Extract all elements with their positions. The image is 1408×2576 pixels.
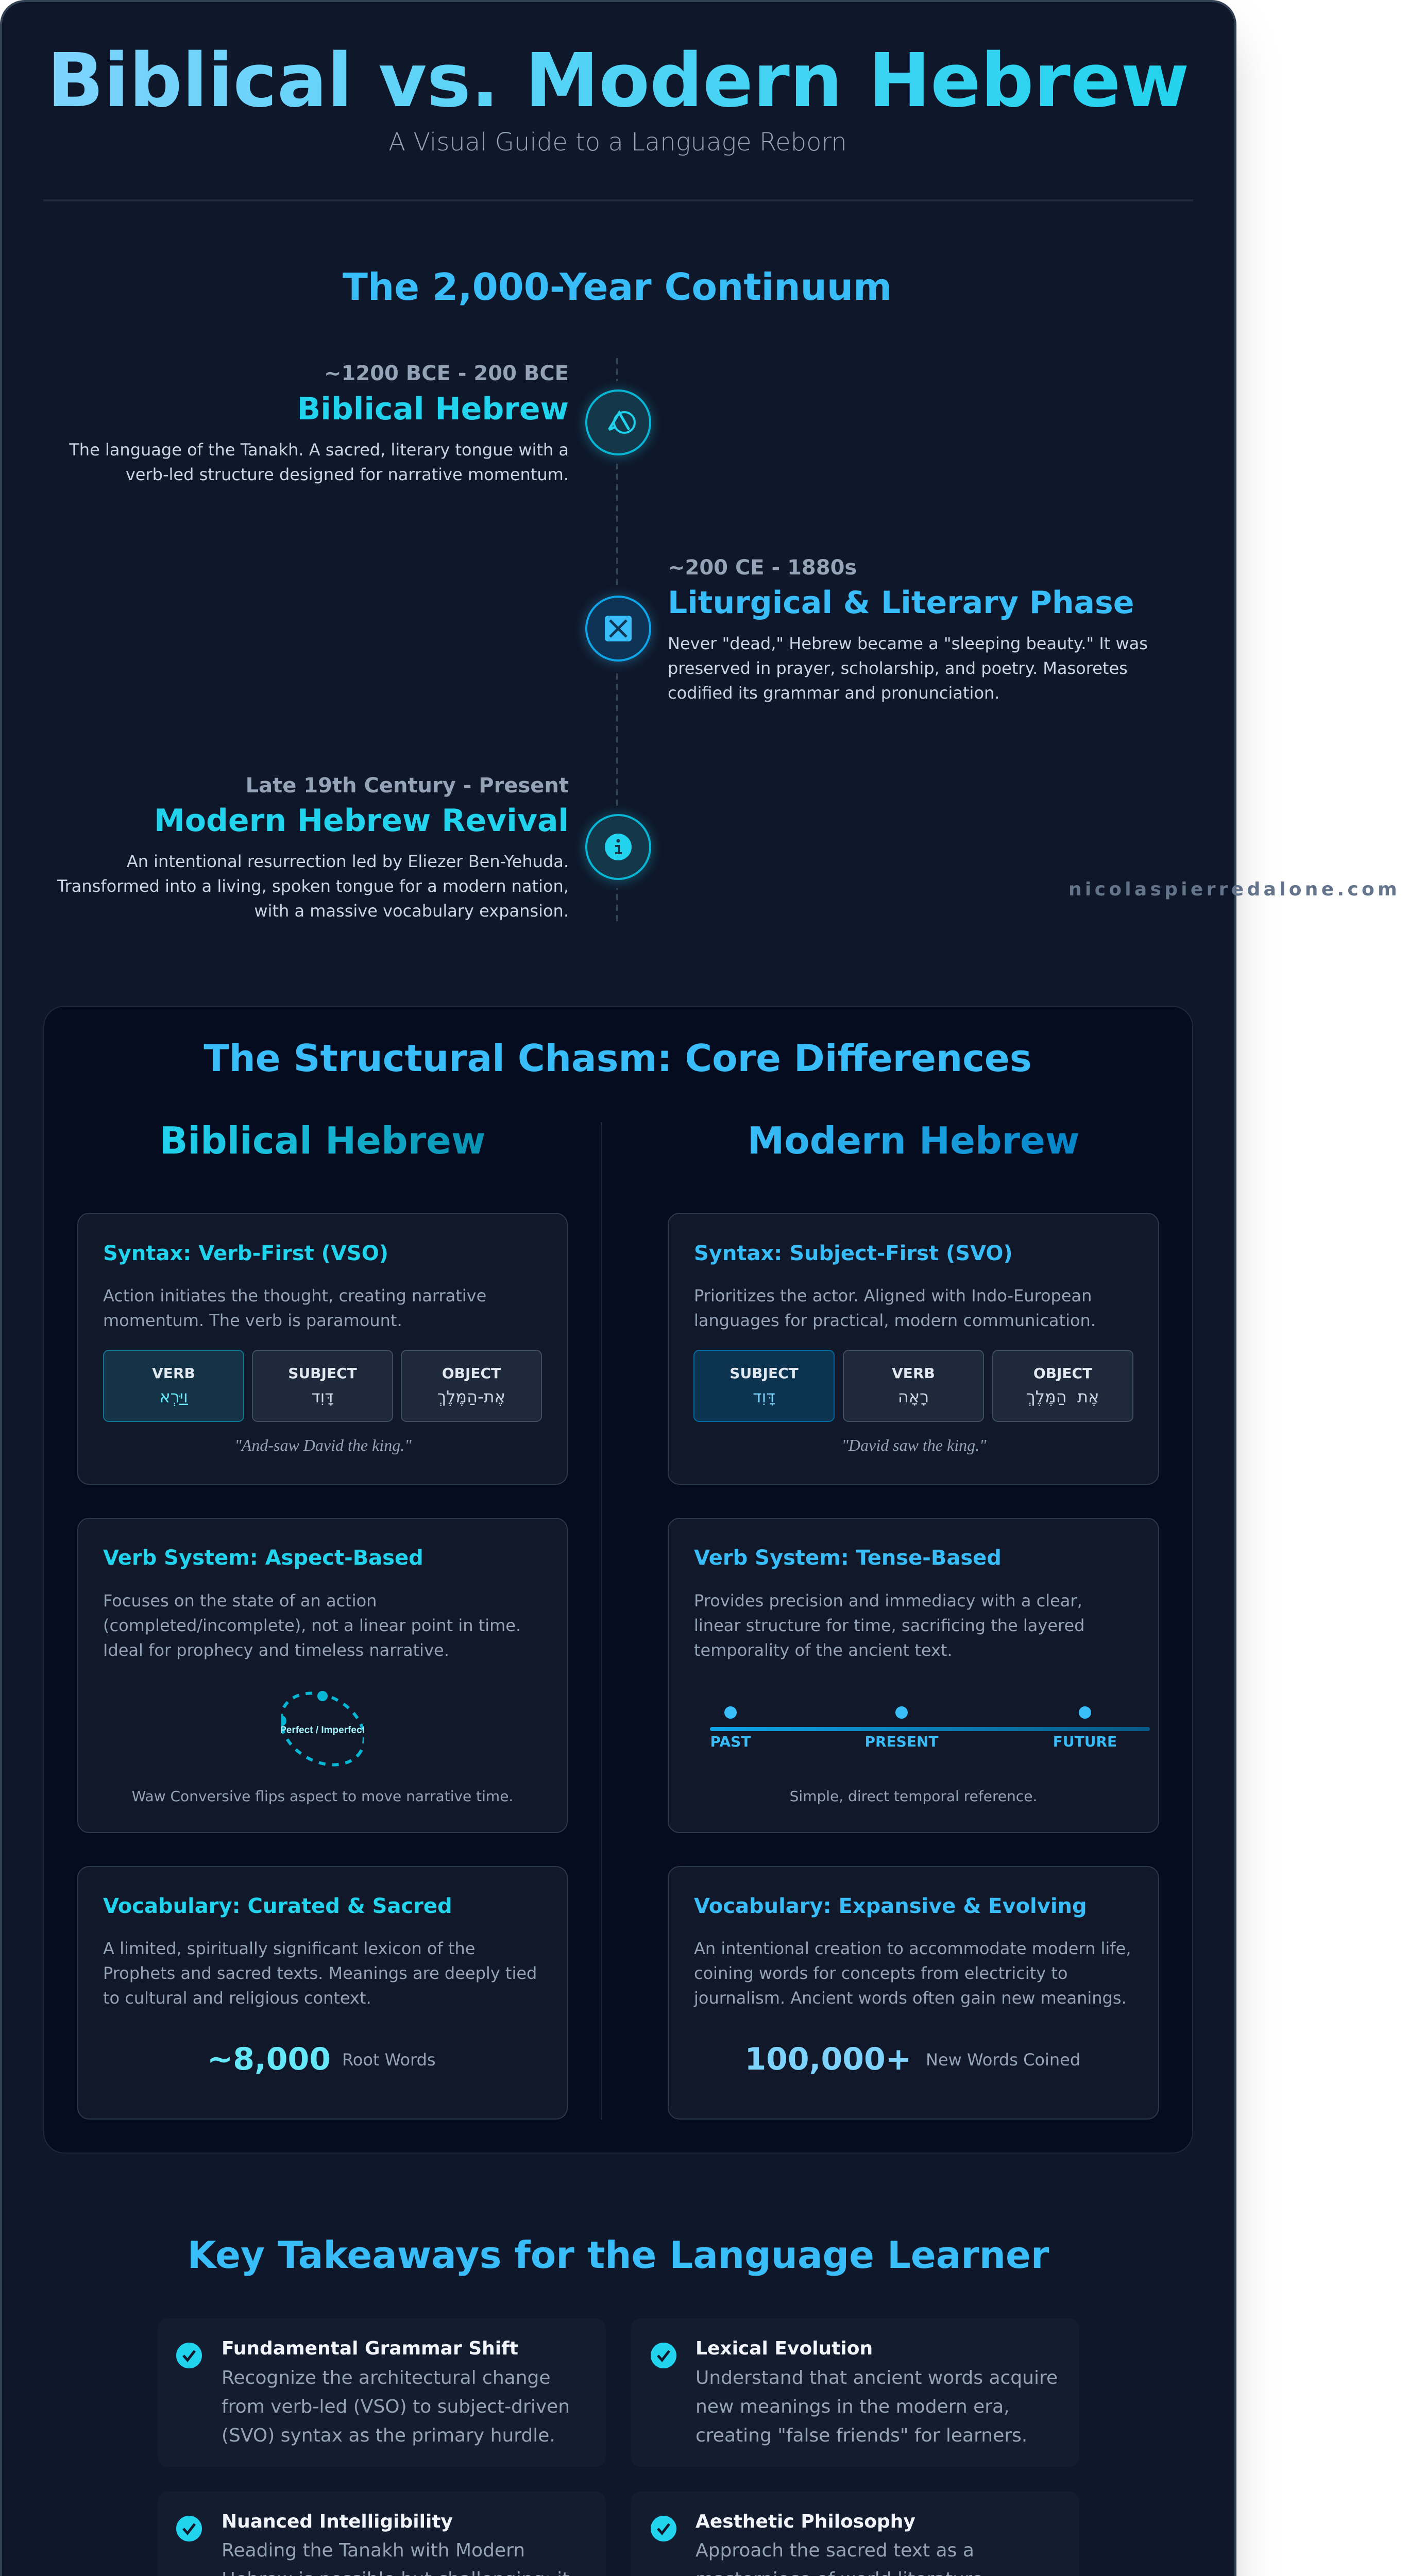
diagram: aspect cycle [281,1691,364,1766]
diagram: tense line: PRESENT [864,1733,939,1750]
timeline [577,358,659,923]
card: biblical vocabulary: A limited, spiritually significant lexicon of the [103,1939,475,1958]
card: biblical verb system: Focuses on the state of an action [103,1591,377,1611]
card: modern vocabulary: coining words for concepts from electricity to [694,1963,1067,1983]
word box: object: אֶת הַמֶּלֶךְ [1027,1387,1099,1406]
card: modern vocabulary: journalism. Ancient words often gain new meanings. [693,1988,1127,2008]
card: modern syntax [668,1213,1159,1484]
card: modern syntax: Prioritizes the actor. Aligned with Indo-European [694,1286,1092,1306]
card: modern vocabulary [668,1867,1159,2119]
card: modern syntax: "David saw the king." [841,1436,987,1454]
icon: check [176,2516,202,2541]
takeaway: lexical evolution: new meanings in the modern era, [695,2396,1010,2417]
card: modern syntax: languages for practical, modern communication. [694,1311,1096,1330]
word box: object: OBJECT [442,1365,501,1382]
word box: verb: VERB [152,1365,195,1382]
card: modern verb system: Verb System: Tense-Based [694,1546,1002,1570]
timeline node: modern [577,806,659,888]
card: biblical verb system: Ideal for prophecy and timeless narrative. [103,1640,449,1660]
section heading: takeaways: Key Takeaways for the Language Learner [188,2233,1049,2277]
section heading: continuum: The 2,000-Year Continuum [343,265,892,309]
timeline entry: modern revival: An intentional resurrection led by Eliezer Ben-Yehuda. [127,852,569,871]
timeline entry: biblical hebrew [69,362,569,484]
takeaway: lexical evolution: Lexical Evolution [695,2338,873,2359]
icon: check [176,2343,202,2368]
takeaway: grammar shift: from verb-led (VSO) to subject-driven [222,2396,570,2417]
title: Biblical vs. Modern Hebrew [47,37,1189,124]
column heading: biblical: Biblical Hebrew [160,1119,485,1162]
card: biblical syntax: "And-saw David the king." [234,1436,412,1454]
takeaway: aesthetic philosophy: Aesthetic Philosophy [695,2511,915,2532]
timeline entry: modern revival: Late 19th Century - Present [246,774,569,798]
timeline entry: biblical hebrew: verb-led structure designed for narrative momentum. [126,465,569,484]
timeline entry: liturgical phase: Liturgical & Literary Phase [668,585,1134,621]
takeaway: lexical evolution [631,2318,1079,2467]
card: biblical verb system [78,1518,567,1833]
word box: subject: דָּוִד [311,1387,334,1406]
word box: object [993,1350,1133,1421]
timeline entry: biblical hebrew: Biblical Hebrew [297,391,569,427]
card: biblical vocabulary [78,1867,567,2119]
word box: subject: דָּוִד [753,1387,775,1406]
timeline entry: modern revival: Transformed into a living, spoken tongue for a modern nation, [57,876,569,896]
timeline entry: liturgical phase: Never "dead," Hebrew became a "sleeping beauty." It was [668,634,1148,653]
word box: subject [252,1350,393,1421]
watermark: nicolaspierredalone.com [1068,879,1400,900]
stat: new words: New Words Coined [926,2050,1080,2070]
card: modern syntax: Syntax: Subject-First (SVO) [694,1242,1013,1265]
timeline entry: biblical hebrew: ~1200 BCE - 200 BCE [324,362,569,385]
card: modern verb system: Provides precision and immediacy with a clear, [694,1591,1082,1611]
timeline entry: modern revival: Modern Hebrew Revival [154,803,569,839]
card: biblical verb system: Waw Conversive flips aspect to move narrative time. [132,1788,513,1805]
diagram: tense line: PAST [710,1733,751,1750]
card: modern vocabulary: An intentional creation to accommodate modern life, [694,1939,1131,1958]
stat: new words: 100,000+ [744,2041,911,2077]
word box: subject: SUBJECT [730,1365,799,1382]
takeaway: lexical evolution: creating "false friends" for learners. [695,2425,1027,2446]
stat: root words [207,2041,436,2077]
word box: subject: SUBJECT [288,1365,357,1382]
timeline node: liturgical [577,587,659,670]
card: biblical vocabulary: Vocabulary: Curated & Sacred [103,1894,452,1918]
card: modern vocabulary: Vocabulary: Expansive & Evolving [694,1894,1087,1918]
timeline entry: modern revival [57,774,569,921]
word box: verb: VERB [892,1365,935,1382]
card: biblical verb system: Verb System: Aspect-Based [103,1546,423,1570]
card: modern verb system: Simple, direct temporal reference. [790,1788,1037,1805]
card: biblical vocabulary: to cultural and religious context. [103,1988,371,2008]
takeaway: intelligibility: Nuanced Intelligibility [222,2511,453,2532]
word box: verb [843,1350,983,1421]
timeline node: biblical [577,381,659,464]
takeaway: aesthetic philosophy: Approach the sacred text as a [695,2540,974,2561]
timeline entry: modern revival: with a massive vocabulary expansion. [254,901,569,921]
stat: root words: Root Words [342,2050,436,2070]
heading: structural chasm: The Structural Chasm: Core Differences [203,1037,1032,1080]
panel: structural chasm [44,1006,1193,2153]
word box: object: OBJECT [1033,1365,1092,1382]
takeaway: grammar shift: Recognize the architectural change [222,2367,551,2388]
word box: subject [694,1350,834,1421]
timeline entry: biblical hebrew: The language of the Tanakh. A sacred, literary tongue with a [69,440,569,460]
takeaway: grammar shift: (SVO) syntax as the primary hurdle. [222,2425,555,2446]
takeaway: grammar shift [158,2318,606,2467]
card: biblical syntax [78,1213,567,1484]
diagram: tense line [710,1706,1150,1750]
takeaway: grammar shift: Fundamental Grammar Shift [222,2338,518,2359]
word box: object [401,1350,541,1421]
word box: object: אֶת-הַמֶּלֶךְ [437,1387,505,1406]
timeline entry: liturgical phase: codified its grammar and pronunciation. [668,683,999,703]
diagram: aspect cycle: Perfect / Imperfect [280,1725,366,1736]
takeaway: intelligibility [158,2492,606,2576]
takeaway: intelligibility: Reading the Tanakh with Modern [222,2540,525,2561]
timeline entry: liturgical phase: preserved in prayer, scholarship, and poetry. Masoretes [668,658,1128,678]
card: biblical syntax: Syntax: Verb-First (VSO) [103,1242,388,1265]
card: modern verb system: temporality of the ancient text. [694,1640,953,1660]
takeaway: lexical evolution: Understand that ancient words acquire [695,2367,1058,2388]
stat: new words [744,2041,1080,2077]
icon: check [651,2516,676,2541]
card: biblical vocabulary: Prophets and sacred texts. Meanings are deeply tied [103,1963,537,1983]
stat: root words: ~8,000 [207,2041,331,2077]
card: modern verb system [668,1518,1159,1833]
icon: check [651,2343,676,2368]
card: biblical syntax: Action initiates the thought, creating narrative [103,1286,486,1306]
subtitle: A Visual Guide to a Language Reborn [388,128,847,157]
diagram: tense line: FUTURE [1053,1733,1117,1750]
word box: verb: רָאָה [898,1387,929,1406]
column heading: modern: Modern Hebrew [748,1119,1079,1162]
card: biblical verb system: (completed/incomplete), not a linear point in time. [103,1616,521,1635]
card: biblical syntax: momentum. The verb is paramount. [103,1311,402,1330]
timeline entry: liturgical phase: ~200 CE - 1880s [668,556,857,580]
timeline entry: liturgical phase [668,556,1148,703]
word box: verb [104,1350,244,1421]
word box: verb: וַיַּרְא [159,1387,188,1406]
takeaway: aesthetic philosophy [631,2492,1079,2576]
card: modern verb system: linear structure for time, sacrificing the layered [694,1616,1084,1635]
